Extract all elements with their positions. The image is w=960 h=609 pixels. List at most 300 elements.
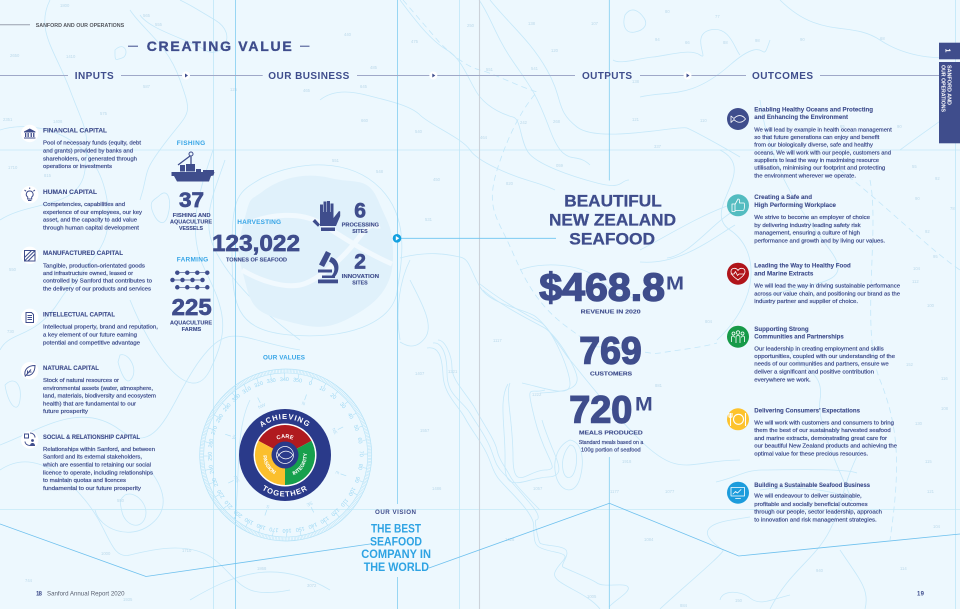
background: nautical chart contours: 150 xyxy=(735,598,743,603)
compass rose: NE xyxy=(331,427,338,435)
background: nautical chart contours: 110 xyxy=(700,118,707,123)
stat: innovation sites xyxy=(318,249,379,287)
stat: meals: MEALS PRODUCED xyxy=(579,431,643,437)
background: nautical chart contours: 1408 xyxy=(53,119,63,124)
stat: farming xyxy=(170,256,213,333)
outcome: communities: needs of our communities and partners, ensure we xyxy=(754,362,889,368)
outcome: consumers: our beautiful New Zealand products and achieving the xyxy=(754,443,897,449)
compass rose: 170 xyxy=(269,525,279,533)
background: nautical chart contours: 138 xyxy=(632,79,640,84)
section flow header: OUTPUTS xyxy=(582,71,632,82)
background: nautical chart contours: 548 xyxy=(376,169,384,174)
outcome: healthy oceans: the environment wherever we operate. xyxy=(754,173,856,179)
values badge: ACHIEVING xyxy=(260,414,310,428)
input: human capital: experience of our employees, our key xyxy=(43,210,142,216)
compass rose: 320 xyxy=(254,381,264,389)
input: manufactured capital xyxy=(21,247,152,293)
input: human capital: HUMAN CAPITAL xyxy=(43,189,97,196)
arrow: outputs to outcomes xyxy=(684,72,692,80)
section tab: OUR OPERATIONS xyxy=(940,65,946,112)
panel: our business xyxy=(170,140,379,333)
compass rose: 240 xyxy=(208,464,216,474)
background: nautical chart contours: 531 xyxy=(425,217,433,222)
input: manufactured capital: and infrastructure owned, leased or xyxy=(43,271,133,277)
background: nautical chart contours: 116 xyxy=(941,376,948,381)
background: nautical chart contours: 337 xyxy=(654,144,662,149)
section flow header: OUTCOMES xyxy=(752,71,813,82)
heading: beautiful new zealand seafood: SEAFOOD xyxy=(569,229,655,248)
stat: revenue: REVENUE IN 2020 xyxy=(581,309,641,315)
values badge: TOGETHER xyxy=(263,485,308,496)
background: nautical chart contours: 1084 xyxy=(644,537,654,542)
compass rose: 190 xyxy=(244,516,255,525)
compass rose: 100 xyxy=(346,486,356,497)
compass rose: 0 xyxy=(308,381,313,387)
outcome: healthy oceans: suppliers to lead the way in maximising resource xyxy=(754,158,879,164)
background: nautical chart contours: 98 xyxy=(755,38,760,43)
compass rose: SW xyxy=(233,474,241,483)
stat: customers: CUSTOMERS xyxy=(590,372,633,378)
outcome: communities: deliver a significant and positive contribution xyxy=(754,370,874,376)
background: nautical chart contours: 112 xyxy=(912,279,919,284)
background: nautical chart contours: 1918 xyxy=(622,459,632,464)
value: integrity segment xyxy=(285,441,315,485)
outcome: healthy oceans: We will lead by example in health ocean management xyxy=(754,127,892,133)
input: intellectual capital: Intellectual property, brand and reputation, xyxy=(43,325,158,331)
outcome: safe workplace: management, ensuring a culture of high xyxy=(754,231,860,237)
vision statement: THE WORLD xyxy=(364,562,429,574)
outcome: healthy oceans: so that future generations can enjoy and benefit xyxy=(754,135,880,141)
background: nautical chart contours: 1117 xyxy=(493,338,502,343)
stat: processing sites: PROCESSING xyxy=(342,222,379,228)
compass rose: N xyxy=(301,401,306,406)
outcome: consumers xyxy=(727,407,897,457)
stat: fishing: FISHING xyxy=(177,140,205,147)
stat: harvesting: TONNES OF SEAFOOD xyxy=(226,257,287,263)
page header: SANFORD AND OUR OPERATIONS xyxy=(36,23,124,29)
stat: fishing: 37 xyxy=(179,188,204,212)
background: nautical chart contours: 1710 xyxy=(8,165,18,170)
compass rose: 130 xyxy=(319,514,330,524)
compass rose: 210 xyxy=(224,499,234,510)
outcome: consumers: them the best of our sustainably harvested seafood xyxy=(754,428,891,434)
stat: revenue: M xyxy=(666,273,684,293)
outcome: sustainable business: through our people, sector leadership, approach xyxy=(754,510,882,516)
background: nautical chart contours: 1000 xyxy=(101,551,111,556)
input: intellectual capital xyxy=(21,309,158,346)
compass rose: 300 xyxy=(231,393,242,404)
compass rose: 230 xyxy=(211,477,220,487)
background: nautical chart contours: 1221 xyxy=(448,369,458,374)
input: natural capital: future prosperity xyxy=(43,409,88,415)
stat: processing sites: SITES xyxy=(352,229,368,235)
vision statement: COMPANY IN xyxy=(361,549,431,561)
background: nautical chart contours: 268 xyxy=(553,119,561,124)
background: nautical chart contours: 465 xyxy=(303,88,311,93)
value: care segment xyxy=(258,425,312,455)
stat: processing sites: 6 xyxy=(354,199,366,223)
panel: outcomes xyxy=(727,106,900,523)
input: manufactured capital: MANUFACTURED CAPITAL xyxy=(43,250,123,257)
outcome: safe workplace xyxy=(727,194,885,244)
background: nautical chart contours: 645 xyxy=(360,84,368,89)
background: nautical chart contours: 1407 xyxy=(415,371,425,376)
icon: fishing vessel xyxy=(172,152,214,182)
background: nautical chart contours: 1557 xyxy=(420,428,430,433)
outcome: communities: Communities and Partnerships xyxy=(754,333,844,340)
background: nautical chart contours: 250 xyxy=(467,23,475,28)
outcome: safe workplace: performance and growth and by living our values. xyxy=(754,238,885,244)
section flow header: INPUTS xyxy=(75,71,114,82)
outcome: sustainable business: profitable and socially beneficial outcomes xyxy=(754,502,868,508)
footer: right page: 19 xyxy=(917,591,925,597)
compass rose: W xyxy=(231,434,237,440)
background: nautical chart contours: 152 xyxy=(906,362,914,367)
panel: inputs xyxy=(21,125,158,492)
background: nautical chart contours: 65 xyxy=(840,124,845,129)
compass rose: 180 xyxy=(256,522,267,530)
input: financial capital xyxy=(21,125,141,170)
background: nautical chart contours: 059 xyxy=(556,163,564,168)
background: nautical chart contours: 550 xyxy=(9,267,17,272)
background: nautical chart contours: 587 xyxy=(143,84,151,89)
arrow: business to outputs xyxy=(429,72,437,80)
background: nautical chart contours: 541 xyxy=(531,66,539,71)
stat: fishing: AQUACULTURE xyxy=(170,219,213,225)
background: nautical chart contours: 77 xyxy=(715,14,720,19)
icon: aquaculture lines xyxy=(171,271,209,289)
background: nautical chart contours: 121 xyxy=(927,489,935,494)
outcome: safe workplace: Creating a Safe and xyxy=(754,194,812,201)
arrow: business to outputs value line xyxy=(393,234,556,243)
outcome: healthy food: and Marine Extracts xyxy=(754,270,814,277)
background: nautical chart contours: 95 xyxy=(933,254,938,259)
background: nautical chart contours: 1410 xyxy=(66,54,76,59)
background: nautical chart contours: 551 xyxy=(486,67,494,72)
background: nautical chart contours: 1935 xyxy=(123,597,133,602)
background: nautical chart contours: 115 xyxy=(925,459,932,464)
background: nautical chart contours: 90 xyxy=(897,124,902,129)
background: nautical chart contours: 744 xyxy=(25,578,33,583)
background: nautical chart contours: 2351 xyxy=(3,117,13,122)
background: nautical chart contours: 1177 xyxy=(610,489,620,494)
stat: harvesting: 123,022 xyxy=(212,230,300,256)
outcome: consumers: Delivering Consumers’ Expectations xyxy=(754,407,861,414)
background: nautical chart contours: 565 xyxy=(143,13,151,18)
compass rose: 20 xyxy=(329,392,337,401)
outcome: healthy food: across our value chain, and positioning our brand as the xyxy=(754,291,900,297)
compass rose: E xyxy=(334,470,340,475)
background: nautical chart contours: 114 xyxy=(900,566,907,571)
outcome: consumers: and marine extracts, demonstrating great care for xyxy=(754,436,887,442)
outcome: consumers: optimal value for these precious resources. xyxy=(754,451,868,457)
outcome: communities: opportunities, coupled with our understanding of the xyxy=(754,354,895,360)
compass rose: 70 xyxy=(358,451,364,457)
background: nautical chart contours: 2650 xyxy=(10,53,20,58)
compass rose: 250 xyxy=(208,452,214,461)
background: nautical chart contours: 881 xyxy=(655,383,663,388)
background: nautical chart contours: 575 xyxy=(100,111,108,116)
compass rose: 150 xyxy=(295,525,305,532)
vision statement: OUR VISION xyxy=(375,509,417,516)
outcome: safe workplace: We strive to become an employer of choice xyxy=(754,215,870,221)
background: nautical chart contours: 78 xyxy=(950,206,955,211)
background: nautical chart contours: 3072 xyxy=(307,583,317,588)
heading: beautiful new zealand seafood: NEW ZEALAND xyxy=(549,211,676,230)
input: social and relationship capital: which are essential to retaining our social xyxy=(42,463,151,469)
compass rose: 280 xyxy=(215,413,225,424)
background: nautical chart contours: 90 xyxy=(800,37,805,42)
background: nautical chart contours: 88 xyxy=(723,40,728,45)
background: nautical chart contours: 555 xyxy=(155,22,163,27)
background: nautical chart contours: 440 xyxy=(344,32,352,37)
compass rose: 40 xyxy=(346,412,354,420)
compass rose: 220 xyxy=(217,488,226,499)
input: financial capital: Pool of necessary funds (equity, debt xyxy=(43,141,141,147)
background: nautical chart contours: 1486 xyxy=(432,486,442,491)
values badge: CARE xyxy=(276,434,294,440)
stat: farming: FARMING xyxy=(177,256,208,264)
stat: harvesting: HARVESTING xyxy=(237,219,281,226)
background: nautical chart contours: 121 xyxy=(632,117,640,122)
compass rose: 140 xyxy=(307,521,318,529)
background: nautical chart contours: 550 xyxy=(117,498,125,503)
background: nautical chart contours: 1005 xyxy=(587,594,597,599)
compass rose xyxy=(176,346,395,564)
input: natural capital: Stock of natural resources or xyxy=(43,378,119,384)
stat: meals xyxy=(569,389,653,454)
compass rose: 80 xyxy=(356,463,363,470)
background: nautical chart contours: 1077 xyxy=(665,489,675,494)
background: nautical chart contours: 804 xyxy=(705,319,713,324)
input: financial capital: FINANCIAL CAPITAL xyxy=(43,128,107,135)
outcome: healthy oceans: and Enhancing the Environment xyxy=(754,114,848,121)
input: social and relationship capital xyxy=(21,431,155,492)
input: social and relationship capital: fundamental to our future prosperity xyxy=(43,486,141,492)
background: nautical chart contours: 55 xyxy=(912,164,917,169)
background: nautical chart contours: 815 xyxy=(44,173,52,178)
stat: farming: 225 xyxy=(172,294,212,320)
section tab: 1 xyxy=(944,48,950,52)
stat: meals: Standard meals based on a xyxy=(579,440,644,446)
background: nautical chart contours: 660 xyxy=(361,118,369,123)
background: nautical chart contours: 104 xyxy=(933,524,941,529)
background: nautical chart contours: 485 xyxy=(370,65,378,70)
background: nautical chart contours: 1057 xyxy=(533,486,543,491)
outcome: sustainable business: Building a Sustainable Seafood Business xyxy=(754,482,871,489)
background: nautical chart contours: 884 xyxy=(680,603,688,608)
background: nautical chart contours: 940 xyxy=(816,568,824,573)
section tab: SANFORD AND xyxy=(946,65,952,105)
background: nautical chart contours: 820 xyxy=(506,181,514,186)
compass rose: S xyxy=(266,504,270,509)
vision statement xyxy=(361,509,431,574)
compass rose: 120 xyxy=(330,506,340,517)
background: nautical chart contours: 92 xyxy=(935,176,940,181)
stat: customers: 769 xyxy=(579,330,642,372)
background: nautical chart contours: 130 xyxy=(915,421,923,426)
compass rose: 340 xyxy=(280,377,289,383)
outcome: safe workplace: High Performing Workplace xyxy=(754,202,837,209)
outcome: consumers: We will work with customers and consumers to bring xyxy=(754,421,894,427)
stat: harvesting xyxy=(212,219,300,263)
outcome: communities xyxy=(727,326,895,383)
stat: innovation sites: SITES xyxy=(352,281,368,287)
background: nautical chart contours: 551 xyxy=(332,158,340,163)
background: nautical chart contours: 242 xyxy=(520,120,528,125)
compass rose: 270 xyxy=(210,425,219,436)
stat: fishing: VESSELS xyxy=(179,226,204,232)
compass rose: 10 xyxy=(318,385,326,393)
compass rose: 290 xyxy=(222,402,233,413)
background: nautical chart contours: 1800 xyxy=(60,3,70,8)
stat: meals: 720 xyxy=(569,389,632,431)
outcome: communities: Our leadership in creating employment and skills xyxy=(754,347,884,353)
input: social and relationship capital: to maintain quotas and licences xyxy=(43,478,126,484)
outcome: sustainable business: to innovation and risk management strategies. xyxy=(754,517,877,523)
compass rose: 30 xyxy=(338,402,347,410)
background: nautical chart contours: 120 xyxy=(551,48,559,53)
background: nautical chart contours: 107 xyxy=(591,21,599,26)
background: nautical chart contours: 100 xyxy=(927,303,935,308)
outcome: healthy food: We will lead the way in driving sustainable performance xyxy=(754,284,900,290)
stat: innovation sites: 2 xyxy=(354,249,366,273)
values badge: PASSION xyxy=(263,455,276,474)
input: financial capital: shareholders, or generated through xyxy=(43,156,137,162)
input: intellectual capital: potential and competitive advantage xyxy=(43,340,140,346)
panel: outputs xyxy=(539,192,684,454)
stat: innovation sites: INNOVATION xyxy=(342,274,379,280)
outcome: communities: everywhere we work. xyxy=(754,377,811,383)
compass rose: SE xyxy=(306,500,313,508)
background: nautical chart contours: 80 xyxy=(665,9,670,14)
values badge xyxy=(239,409,331,501)
footer: left page: 18 xyxy=(36,591,43,597)
input: natural capital: environmental assets (water, atmosphere, xyxy=(43,386,153,392)
compass rose: 330 xyxy=(266,378,276,385)
background: nautical chart contours: 1710 xyxy=(182,548,192,553)
input: natural capital xyxy=(21,362,156,415)
input: intellectual capital: INTELLECTUAL CAPITAL xyxy=(43,312,115,318)
input: intellectual capital: a key element of our future earning xyxy=(43,332,137,338)
outcome: healthy food xyxy=(727,262,900,305)
outcome: healthy oceans: utilisation, minimising our footprint and protecting xyxy=(754,166,885,172)
input: manufactured capital: controlled by Sanford that contributes to xyxy=(43,279,152,285)
compass rose: 60 xyxy=(356,437,363,444)
input: natural capital: NATURAL CAPITAL xyxy=(43,365,99,372)
icon: fish logo xyxy=(276,446,294,464)
background: nautical chart contours: 68 xyxy=(880,36,885,41)
background: nautical chart contours: 104 xyxy=(913,266,921,271)
values badge: INTEGRITY xyxy=(292,453,307,476)
background: nautical chart contours: 1428 xyxy=(505,537,515,542)
input: social and relationship capital: SOCIAL & RELATIONSHIP CAPITAL xyxy=(43,434,140,441)
background: nautical chart contours: 66 xyxy=(685,40,690,45)
heading: our values: OUR VALUES xyxy=(263,354,305,362)
background: nautical chart contours: 730 xyxy=(7,329,15,334)
icon: glove xyxy=(312,201,340,231)
outcome: sustainable business: We will endeavour to deliver sustainable, xyxy=(754,494,862,500)
input: financial capital: and grants) provided by banks and xyxy=(43,148,133,154)
vision statement: THE BEST xyxy=(371,524,421,536)
input: natural capital: land, materials, biodiversity and ecosystem xyxy=(43,394,156,400)
compass rose: 50 xyxy=(352,424,360,432)
input: natural capital: health) that are fundamental to our xyxy=(43,401,136,407)
compass rose: NW xyxy=(257,402,267,410)
input: human capital xyxy=(21,186,142,231)
stat: fishing xyxy=(170,140,214,232)
input: manufactured capital: Tangible, production-orientated goods xyxy=(43,263,145,269)
heading: beautiful new zealand seafood xyxy=(549,192,676,248)
input: social and relationship capital: Relationships within Sanford, and between xyxy=(43,447,155,453)
background: nautical chart contours: 450 xyxy=(433,177,441,182)
outcome: healthy oceans xyxy=(727,106,892,179)
section flow header: OUR BUSINESS xyxy=(268,71,350,82)
outcome: safe workplace: by delivering industry leading safety risk xyxy=(754,223,861,229)
compass rose: 260 xyxy=(208,438,215,448)
input: manufactured capital: the delivery of our products and services xyxy=(43,287,151,293)
background: nautical chart contours: 90 xyxy=(915,196,920,201)
input: social and relationship capital: licence to operate, including relationships xyxy=(43,471,153,477)
background: nautical chart contours: 138 xyxy=(528,21,536,26)
background: nautical chart contours: 125 xyxy=(230,87,238,92)
background: nautical chart contours: 94 xyxy=(655,37,660,42)
input: financial capital: operations or investments xyxy=(43,164,112,170)
background: nautical chart contours: 464 xyxy=(480,135,488,140)
compass rose: 160 xyxy=(282,527,292,533)
stat: fishing: FISHING AND xyxy=(173,213,211,219)
background: nautical chart contours: 1868 xyxy=(257,566,267,571)
outcome: healthy oceans: Enabling Healthy Oceans and Protecting xyxy=(754,106,873,113)
input: human capital: Competencies, capabilities and xyxy=(43,202,125,208)
footer: left page: Sanford Annual Report 2020 xyxy=(47,590,125,597)
stat: meals: 100g portion of seafood xyxy=(581,448,641,454)
stat: farming: FARMS xyxy=(182,327,202,333)
background: nautical chart contours: 540 xyxy=(415,129,423,134)
outcome: healthy oceans: oceans. We will work with our people, customers and xyxy=(754,150,891,156)
background: nautical chart contours: 1222 xyxy=(532,392,542,397)
outcome: sustainable business xyxy=(727,482,882,523)
input: human capital: through human capital development xyxy=(43,225,139,231)
section flow header xyxy=(0,71,939,82)
outcome: healthy oceans: from our biologically diverse, safe and healthy xyxy=(754,143,873,149)
compass rose: 110 xyxy=(339,497,349,507)
stat: meals: M xyxy=(635,395,653,416)
outcome: healthy food: industry partner and supplier of choice. xyxy=(754,299,858,305)
input: human capital: asset, and the capacity to add value xyxy=(43,218,137,224)
vision statement: SEAFOOD xyxy=(370,536,422,548)
title: CREATING VALUE xyxy=(147,38,292,54)
outcome: healthy food: Leading the Way to Healthy Food xyxy=(754,262,851,269)
background: nautical chart contours: 92 xyxy=(925,229,930,234)
compass rose: 310 xyxy=(242,386,252,396)
section tab xyxy=(939,43,960,143)
heading: beautiful new zealand seafood: BEAUTIFUL xyxy=(564,192,662,211)
value: passion segment xyxy=(255,441,285,485)
stat: revenue: $468.8 xyxy=(539,267,665,310)
compass rose: 200 xyxy=(233,508,244,518)
compass rose: 90 xyxy=(353,476,360,483)
stat: farming: AQUACULTURE xyxy=(170,320,213,326)
arrow: inputs to business xyxy=(182,72,190,80)
outcome: communities: Supporting Strong xyxy=(754,326,809,333)
page header xyxy=(0,23,124,29)
icon: microscope xyxy=(318,251,338,283)
stat: processing sites xyxy=(312,199,379,235)
compass rose: 350 xyxy=(293,377,302,385)
background: nautical chart contours: 108 xyxy=(941,406,949,411)
harvest island map xyxy=(239,176,393,327)
